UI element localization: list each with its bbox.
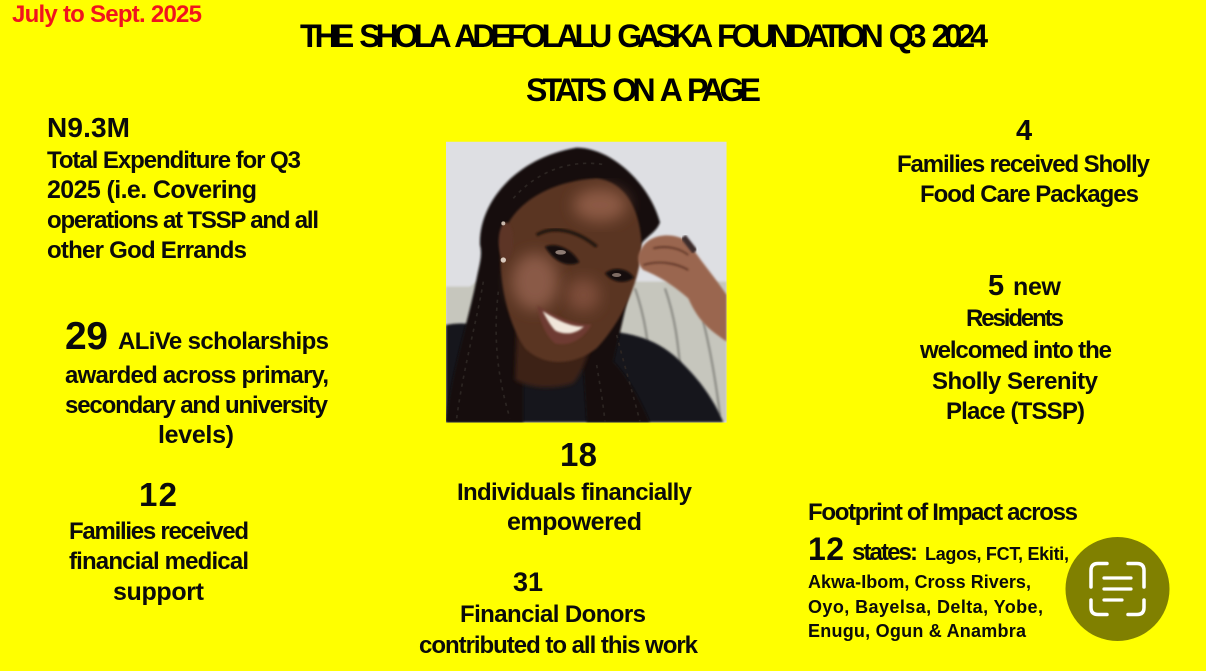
- portrait photo: [446, 142, 727, 423]
- stat: food care packages: [897, 115, 1151, 208]
- title: STATS ON A PAGE: [526, 72, 761, 108]
- hand: [638, 235, 727, 342]
- stat: scholarships: [65, 315, 329, 449]
- stat: footprint of impact: 12: [808, 531, 844, 567]
- stat: financial donors: [419, 567, 699, 659]
- stat: footprint of impact: Lagos, FCT, Ekiti,: [925, 544, 1069, 564]
- icon: text scan button: [1066, 537, 1170, 641]
- stat: scholarships: awarded across primary,: [65, 362, 329, 389]
- ear: [498, 222, 509, 256]
- stat: total expenditure: Total Expenditure for Q3: [47, 147, 301, 174]
- stat: scholarships: 29: [65, 315, 108, 358]
- stat: medical support: [69, 476, 249, 606]
- face: [500, 178, 642, 362]
- face highlights: [512, 253, 558, 310]
- stat: financial donors: contributed to all this work: [419, 632, 699, 659]
- braids texture: [457, 163, 640, 422]
- stat: individuals empowered: empowered: [507, 508, 642, 536]
- mouth: [537, 306, 592, 344]
- stat: footprint of impact: Akwa-Ibom, Cross Rivers,: [808, 572, 1031, 592]
- stat: financial donors: 31: [513, 567, 543, 597]
- stat: medical support: support: [113, 578, 205, 606]
- hair mass: [446, 148, 660, 422]
- stat: food care packages: 4: [1016, 115, 1032, 147]
- stat: new residents: [919, 270, 1112, 425]
- stat: individuals empowered: Individuals financially: [457, 479, 693, 506]
- stat: food care packages: Food Care Packages: [920, 181, 1139, 208]
- stat: scholarships: secondary and university: [65, 392, 329, 419]
- stat: scholarships: levels): [158, 421, 234, 449]
- sofa behind: [446, 282, 727, 422]
- stat: footprint of impact: states:: [852, 539, 918, 566]
- neck: [514, 334, 590, 389]
- stat: footprint of impact: Footprint of Impact across: [808, 499, 1078, 526]
- date label: July to Sept. 2025: [12, 1, 202, 28]
- stat: total expenditure: operations at TSSP and all: [47, 207, 319, 234]
- stat: footprint of impact: [808, 499, 1078, 641]
- stat: total expenditure: 2025 (i.e. Covering: [47, 176, 257, 204]
- stat: new residents: Place (TSSP): [946, 398, 1085, 425]
- stat: financial donors: Financial Donors: [460, 601, 646, 628]
- stat: scholarships: ALiVe scholarships: [118, 328, 329, 355]
- stat: new residents: welcomed into the: [919, 337, 1112, 364]
- title: THE SHOLA ADEFOLALU GASKA FOUNDATION Q3 2024: [300, 18, 988, 54]
- stat: footprint of impact: Oyo, Bayelsa, Delta, Yobe,: [808, 597, 1043, 617]
- stat: individuals empowered: 18: [560, 436, 597, 473]
- wrist beads: [713, 362, 733, 372]
- eyebrows: [537, 230, 597, 247]
- stat: individuals empowered: [457, 436, 693, 536]
- stat: new residents: new: [1013, 273, 1062, 301]
- stat: new residents: Residents: [966, 305, 1064, 332]
- stat: total expenditure: N9.3M: [47, 112, 130, 143]
- eyes: [545, 245, 579, 264]
- stat: medical support: financial medical: [69, 548, 249, 575]
- stat: footprint of impact: Enugu, Ogun & Anambra: [808, 621, 1027, 641]
- stat: medical support: 12: [139, 476, 177, 513]
- stat: total expenditure: [47, 112, 319, 264]
- stat: food care packages: Families received Sholly: [897, 151, 1151, 178]
- title: [300, 18, 988, 108]
- stat: total expenditure: other God Errands: [47, 237, 247, 264]
- stat: new residents: 5: [988, 270, 1004, 302]
- stat: new residents: Sholly Serenity: [932, 368, 1099, 395]
- stat: medical support: Families received: [69, 518, 249, 545]
- sweater: [446, 323, 723, 422]
